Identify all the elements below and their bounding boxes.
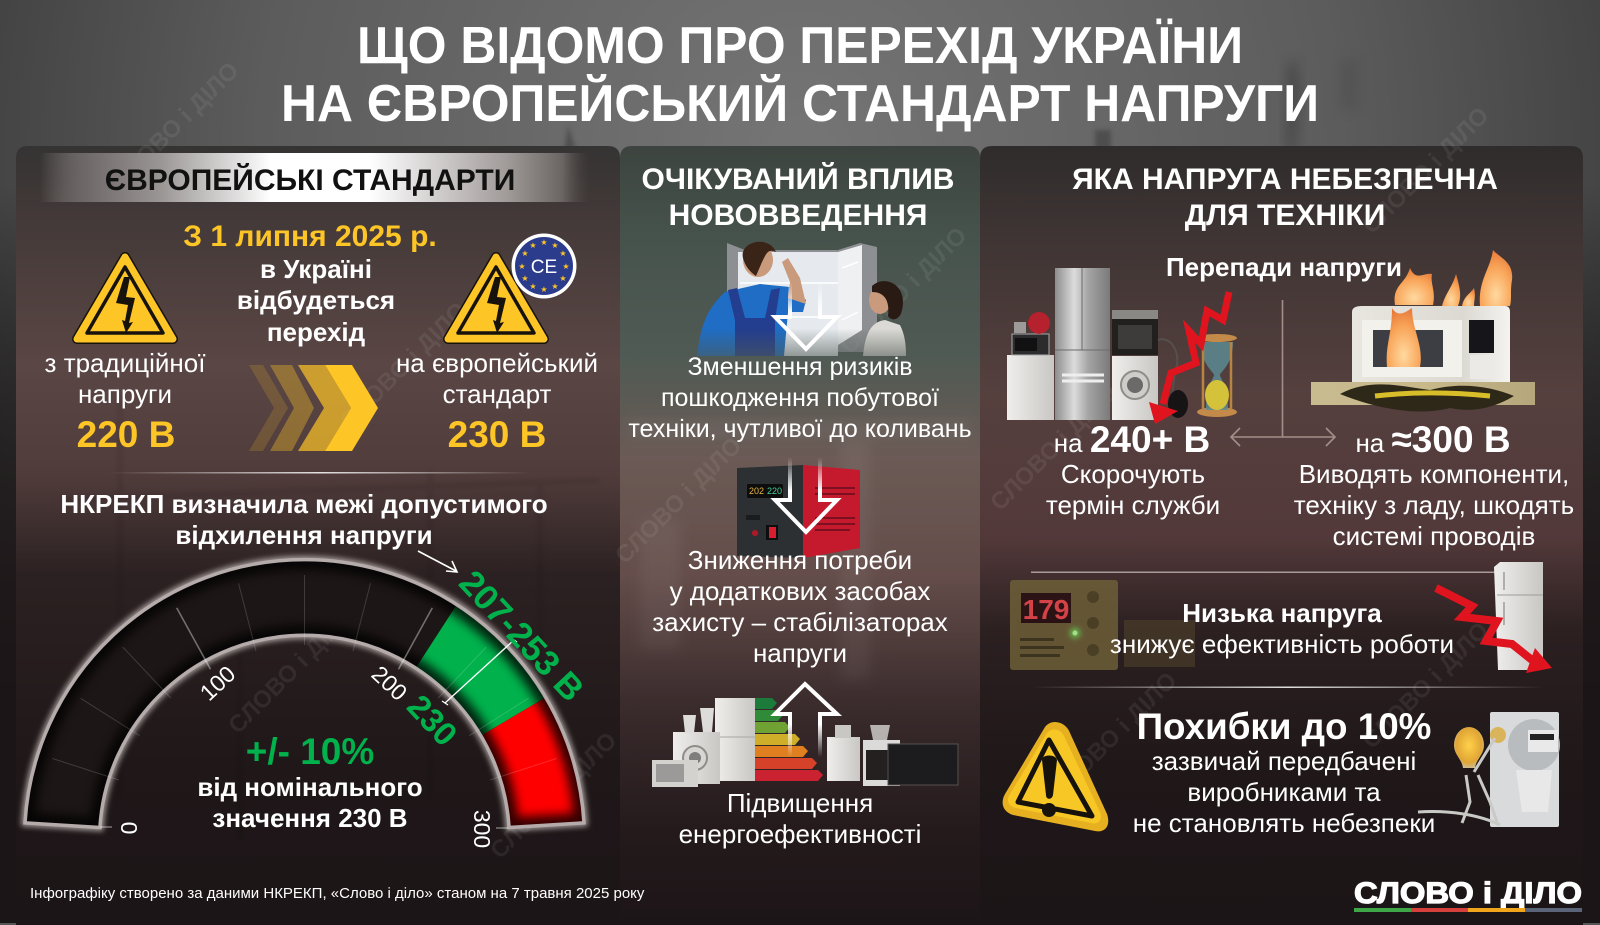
text: increased efficiency: Підвищення [727,788,873,818]
watermarks: СЛОВО і ДІЛО [1357,617,1494,754]
gauge outer glow [25,560,584,828]
icon: arrow down one [775,282,837,349]
image: technician and woman at fridge [697,242,906,356]
text: from traditional voltage: з традиційної [45,348,205,378]
watermarks: СЛОВО і ДІЛО [1045,667,1182,804]
gauge scale labels: 0 [116,822,142,834]
watermarks: СЛОВО і ДІЛО [107,57,244,194]
icon: high voltage sign 230 [448,257,544,339]
text: reduced risk of damage: Зменшення ризиків [687,353,913,381]
watermarks: СЛОВО і ДІЛО [1357,102,1494,239]
text: to European standard: на європейський [396,348,598,378]
image: voltage relay 179 [1010,580,1195,670]
text: reduced need for protection: Зниження потреби [688,545,912,575]
icon: CE badge: ★ [540,238,548,247]
heading band: European standards [40,153,590,202]
watermarks [107,57,1494,864]
heading: NEURC limits: НКРЕКП визначила межі допустимого [60,489,548,519]
gauge green zone [416,605,546,736]
icon: CE badge: ★ [551,241,559,250]
text: 240+ V: Скорочують [1061,459,1205,489]
text: increased efficiency: енергоефективності [679,819,921,849]
image: voltage stabilizer: 220 [767,486,782,496]
image: voltage relay 179: 179 [1023,594,1069,625]
divider [1031,572,1501,573]
icon: CE badge: ★ [559,274,567,283]
title [281,17,1319,133]
text: errors up to ten percent: Похибки до 10% [1137,706,1431,747]
panel: European standards [16,146,620,925]
heading: NEURC limits [60,489,548,550]
text: to European standard: 230 В [448,414,546,455]
icon: red zigzag arrow [1149,292,1229,424]
icon: CE badge: ★ [559,249,567,258]
text: plus minus ten percent: +/- 10% [246,731,374,772]
text: errors up to ten percent: зазвичай передбачені [1152,746,1416,776]
text: reduced need for protection: напруги [753,638,847,668]
watermarks: СЛОВО і ДІЛО [335,297,472,434]
arrow to range label [418,551,457,572]
icon: CE badge: ★ [529,282,537,291]
text: 240+ V: термін служби [1046,490,1220,520]
text: about 300 V: системі проводів [1333,521,1535,551]
label: 230: 230 [400,687,465,753]
text: to European standard [396,348,598,455]
gauge scale labels: 100 [195,661,240,706]
text: errors up to ten percent [1133,706,1435,838]
icon: CE badge: ★ [529,241,537,250]
text: errors up to ten percent: не становлять небезпеки [1133,808,1435,838]
divider [110,472,530,474]
text: 240+ V: на 240+ В [1054,419,1210,460]
text: plus minus ten percent [197,731,423,833]
watermarks: СЛОВО і ДІЛО [835,222,972,359]
text: about 300 V: Виводять компоненти, [1299,459,1569,489]
energy efficiency bars [755,698,823,781]
watermarks: СЛОВО і ДІЛО [485,727,622,864]
icon: CE badge: CE [531,257,557,278]
text: reduced risk of damage: техніки, чутливої до коливань [628,415,972,443]
date and transition text: З 1 липня 2025 р. [183,220,437,253]
text: low voltage [1110,598,1454,659]
subheading: voltage surges: Перепади напруги [1166,252,1402,282]
icon: hourglass [1197,334,1237,417]
icon: warning triangle [1003,722,1108,831]
text: from traditional voltage: 220 В [77,414,175,455]
text: reduced need for protection: у додаткових засобах [670,576,930,606]
gauge scale labels: 200 [367,661,412,706]
icon: arrow up [775,684,837,757]
text: about 300 V [1294,419,1574,551]
gauge chart [25,560,591,848]
image: electric meter and bulb figure [1418,712,1560,827]
icon: falling red arrow [1436,588,1552,673]
icon: arrow down two [775,457,837,532]
text: reduced risk of damage: пошкодження побутової [661,384,939,412]
icon: high voltage sign 220 [77,257,173,339]
date and transition text [183,220,437,347]
watermarks: СЛОВО і ДІЛО [985,379,1122,516]
heading: dangerous voltage: ДЛЯ ТЕХНІКИ [1185,199,1385,232]
text: about 300 V: на ≈300 В [1355,419,1511,460]
panel: expected impact [620,146,980,925]
text: from traditional voltage [45,348,205,455]
image: burning microwave [1311,250,1535,412]
gauge dark band [25,560,584,828]
heading: expected impact: НОВОВВЕДЕННЯ [669,199,927,232]
image: household appliances [1007,268,1188,420]
title: ЩО ВІДОМО ПРО ПЕРЕХІД УКРАЇНИ [357,17,1243,75]
icon: CE badge: ★ [562,262,570,271]
text: plus minus ten percent: значення 230 В [212,803,408,833]
gauge scale labels [116,661,495,848]
text: reduced need for protection: захисту – стабілізаторах [652,607,948,637]
flames [1395,250,1512,306]
icon: CE badge: ★ [518,262,526,271]
gauge inner shading [25,560,584,828]
icon: CE badge: ★ [551,282,559,291]
title: НА ЄВРОПЕЙСЬКИЙ СТАНДАРТ НАПРУГИ [281,74,1319,133]
gauge scale labels: 300 [469,810,495,848]
gauge ticks [52,575,557,828]
label: 207-253 V: 207-253 В [451,563,591,709]
panel: dangerous voltage [980,146,1583,925]
icon: CE badge: ★ [521,249,529,258]
heading band: European standards: ЄВРОПЕЙСЬКІ СТАНДАРТИ [105,163,515,197]
watermarks: СЛОВО і ДІЛО [610,432,747,569]
icon: CE badge: ★ [540,285,548,294]
watermarks: СЛОВО і ДІЛО [223,602,360,739]
text: plus minus ten percent: від номінального [197,772,423,802]
text: about 300 V: техніку з ладу, шкодять [1294,490,1574,520]
image: voltage stabilizer: 202 [749,486,764,496]
text: from traditional voltage: напруги [78,379,172,409]
text: low voltage: Низька напруга [1182,598,1382,628]
text: reduced need for protection [652,545,948,668]
date and transition text: відбудеться [237,285,395,315]
text: increased efficiency [679,788,921,849]
image: appliances and energy label [652,698,958,787]
image: voltage stabilizer [737,465,860,558]
footer source: Інфографіку створено за даними НКРЕКП, «Слово і діло» станом на 7 травня 2025 року [30,885,645,902]
image: white fridge [1494,562,1543,670]
icon: CE badge [512,234,576,298]
gauge red zone [481,698,584,828]
text: low voltage: знижує ефективність роботи [1110,629,1454,659]
icon: CE badge: ★ [521,274,529,283]
logo: СЛОВО і ДІЛО [1354,877,1582,910]
heading: expected impact [642,162,954,232]
divider with double arrow [1231,300,1335,446]
divider [1031,686,1545,688]
text: to European standard: стандарт [443,379,552,409]
heading: expected impact: ОЧІКУВАНИЙ ВПЛИВ [642,162,954,196]
heading: dangerous voltage: ЯКА НАПРУГА НЕБЕЗПЕЧНА [1072,163,1498,196]
text: errors up to ten percent: виробниками та [1187,777,1381,807]
date and transition text: перехід [267,317,366,347]
marker for 230 V [442,638,517,705]
date and transition text: в Україні [260,254,372,284]
heading: NEURC limits: відхилення напруги [175,520,433,550]
text: reduced risk of damage [628,353,972,443]
text: 240+ V [1046,419,1220,520]
heading: dangerous voltage [1072,163,1498,232]
icon: chevrons [249,365,378,451]
